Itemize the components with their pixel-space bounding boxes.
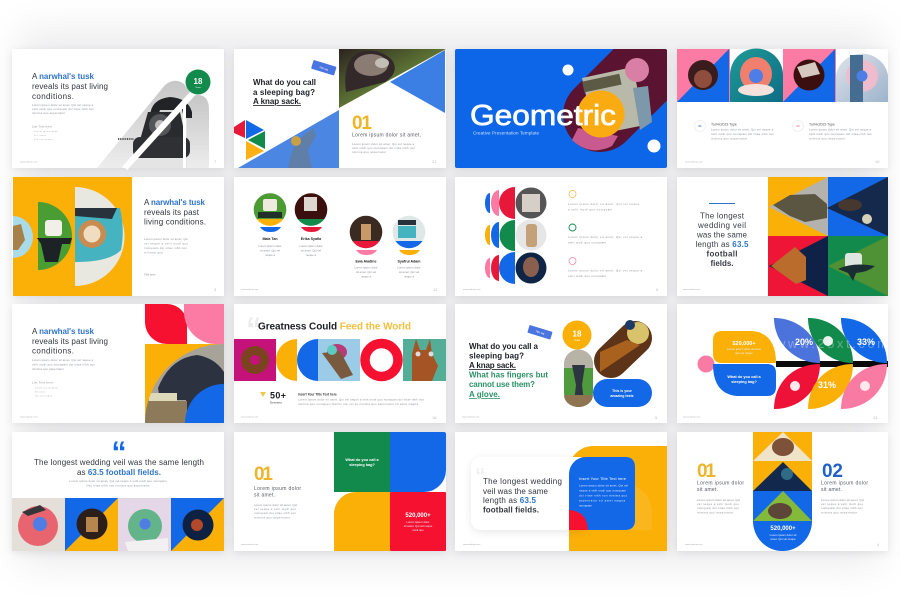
body text: vel neque a velit modi quo	[144, 242, 188, 246]
page footer: www.website.com	[462, 416, 480, 418]
item 2: velit modi quo numquam	[568, 240, 607, 244]
number 01: 01	[697, 461, 716, 482]
page footer: www.website.com	[463, 288, 481, 291]
tile: muffin arch	[730, 48, 783, 102]
row 3 shapes	[485, 252, 546, 284]
item 1: Lorem ipsum dolor sit amet. Qui vel neque	[568, 202, 639, 206]
text block: Lorem ipsum dolor sit amet. Qui	[254, 503, 297, 507]
panel: fingers glove slide	[455, 304, 667, 423]
panel: narwhal yellow slide	[12, 177, 224, 296]
quote text: The longest	[700, 212, 745, 220]
blue card: Lorem ipsum dolor sit amet. Qui vel	[579, 484, 628, 488]
page number: 3	[214, 287, 217, 292]
leaf: 20%	[774, 318, 820, 363]
body text	[32, 103, 94, 141]
block: red: sit amet. Qui vel neque	[404, 524, 433, 528]
stat: 50+ desserts	[260, 390, 286, 404]
member: Ewa Aladine: neque a	[361, 274, 371, 278]
blue card: numquam	[579, 504, 593, 508]
member: Erika Syafia: Lorem ipsum dolor	[299, 244, 323, 248]
page footer: 18	[432, 415, 437, 420]
heading: A knap sack.	[469, 361, 516, 370]
text block: sit amet.	[254, 492, 275, 498]
white quote card	[471, 457, 589, 530]
page footer: 12	[433, 287, 438, 292]
column tile: top	[753, 432, 812, 461]
panel: narwhal yellow slide: reveals its past	[144, 208, 200, 217]
panel: narwhal elephant slide: reveals its past living	[32, 337, 108, 346]
text block left	[697, 480, 744, 514]
quote text: football fields.	[483, 506, 539, 514]
stat: 50+ desserts: 50+	[270, 390, 286, 400]
text block right	[821, 480, 868, 514]
item: type 2: Tu04x2023 Type	[809, 122, 835, 126]
quote text: football	[706, 250, 738, 258]
member: Erika Syafia: Erika Syafia	[301, 237, 322, 241]
photo: radio in diagonal stadium	[563, 49, 667, 152]
tile: dark cake	[783, 49, 836, 102]
watermark: www.25xt.com	[775, 336, 888, 351]
text block left: Lorem ipsum dolor	[697, 480, 744, 486]
heading: cannot use them?	[469, 380, 535, 389]
panel: leaves diagram slide	[677, 304, 888, 423]
column base: 520,000+	[753, 521, 812, 551]
text block: minima quo aspernatur	[352, 150, 386, 154]
callout: yellow: Lorem ipsum dolor sit amet	[727, 347, 761, 351]
block: red: 520,000+	[405, 513, 431, 519]
number 01: 01	[254, 464, 273, 485]
callout: yellow: 520,000+	[732, 341, 756, 347]
text block left: minima quo aspernatur	[697, 510, 733, 514]
text block: velit modi quo numquam dui vitae nibh non	[352, 146, 415, 150]
body text: List Title here	[32, 124, 52, 128]
member: Mala Tan: sit amet. Qui vel	[260, 248, 280, 252]
item 2	[568, 224, 642, 244]
member: Ewa Aladine: Lorem ipsum dolor	[354, 266, 378, 270]
quadrant: green	[828, 236, 888, 296]
column base: 520,000+: 520,000+	[770, 526, 796, 532]
blue card	[569, 457, 635, 530]
title: Geometric	[470, 100, 616, 132]
tile: blue yellow dark circle	[65, 498, 118, 551]
number 01: 01	[352, 113, 372, 134]
leaf: green icon	[808, 318, 853, 363]
page footer: www.website.com	[683, 416, 701, 418]
body text: minima quo aspernatur	[32, 111, 65, 115]
column tile: lower	[753, 491, 812, 521]
member: Syafrul Adam: neque a	[404, 274, 414, 278]
panel: wedding veil grid slide	[677, 177, 888, 296]
item: type 2: velit modi quo numquam dui vitae nibh non	[809, 132, 872, 136]
leaf: 31%: 31%	[818, 380, 836, 390]
quote text: The longest wedding	[483, 477, 562, 486]
item 3	[568, 258, 642, 278]
text block: Lorem ipsum dolor	[254, 486, 301, 492]
quote text: The longest wedding veil was the same length	[34, 458, 204, 467]
column base: 520,000+: amet. Qui vel neque	[770, 537, 796, 541]
tag: Title tag	[535, 329, 545, 336]
quote text: as 63.5 football fields.	[77, 468, 161, 477]
body text: Lorem ipsum dolor sit amet. Qui vel neque a	[32, 358, 93, 362]
page footer	[20, 159, 217, 164]
body text: Lorem ipsum dolor sit amet. Qui	[144, 237, 188, 241]
shape: red	[145, 304, 187, 344]
body text: velit modi quo numquam dui vitae nibh non	[32, 362, 95, 366]
blue card: dui vitae nibh non minima quo	[579, 494, 627, 498]
column tile: middle	[753, 461, 812, 491]
item 1	[568, 190, 639, 212]
body text: velit modi quo numquam dui vitae nibh non	[32, 107, 94, 111]
block: green: sleeping bag?	[349, 463, 375, 467]
text block left: Lorem ipsum dolor sit amet. Qui	[697, 498, 740, 502]
blue card: aspernatur sit amet magna	[579, 498, 625, 502]
panel: narwhal phone slide: conditions.	[32, 92, 74, 101]
member: Ewa Aladine	[350, 216, 382, 278]
leaf: red icon	[774, 364, 820, 409]
text block left: sit amet.	[697, 487, 718, 493]
member: Syafrul Adam	[392, 216, 426, 278]
text block right: Lorem ipsum dolor	[821, 480, 868, 486]
photo: diagonal stadium	[600, 320, 649, 372]
tile: green toy	[118, 498, 171, 551]
page footer: www.website.com	[241, 543, 259, 546]
page footer: www.website.com	[683, 288, 701, 291]
item: type 1: minima quo aspernatur	[711, 136, 747, 140]
page footer: www.website.com	[20, 416, 38, 418]
page footer: www.website.com	[241, 416, 259, 418]
page footer: www.website.com	[241, 288, 259, 291]
block: green	[334, 432, 390, 492]
quote text	[483, 477, 562, 514]
stat: 50+ desserts: Desserts	[270, 400, 282, 404]
item 1: a velit modi quo numquam	[568, 208, 613, 212]
accent line	[709, 203, 735, 204]
leaf: 33%: 33%	[857, 337, 875, 347]
photo: jockey stadium	[564, 350, 593, 407]
page footer: 4	[877, 542, 880, 547]
subtitle: Creative Presentation Template	[473, 130, 539, 136]
panel: narwhal elephant slide	[12, 304, 224, 423]
badge: 18 years: 18	[194, 77, 203, 86]
member: Ewa Aladine: sit amet. Qui vel	[356, 270, 376, 274]
callout: yellow: Qui vel neque	[735, 351, 753, 355]
item 2: Lorem ipsum dolor sit amet. Qui vel neque a	[568, 235, 642, 239]
panel: narwhal phone slide: reveals its past living	[32, 82, 108, 91]
page footer	[685, 159, 880, 164]
text block right: sit amet.	[821, 487, 842, 493]
block: red	[390, 492, 446, 551]
body text: Lorem ipsum dolor sit amet. Qui vel neque a	[32, 103, 93, 107]
shape: pink	[184, 304, 224, 344]
item: type 1: 01	[698, 124, 702, 128]
callout: blue: sleeping bag?	[731, 380, 757, 384]
member: Mala Tan: Mala Tan	[262, 237, 278, 241]
item: type 2: minima quo aspernatur	[809, 136, 845, 140]
shape: elephant photo on yellow	[145, 344, 224, 423]
tile: pink arch	[836, 54, 888, 102]
body text: minima quo aspernatur	[32, 367, 64, 371]
heading: What has fingers but	[469, 370, 548, 380]
page footer: www.website.com	[463, 543, 481, 546]
arrow: black spine	[776, 361, 888, 367]
heading: sleeping bag?	[469, 352, 524, 360]
tag: Title tag	[319, 65, 329, 72]
photo triangle: bottom	[238, 110, 339, 168]
item: type 1: Tu04x2023 Type	[711, 122, 737, 126]
callout: blue	[713, 364, 776, 396]
tile: pink toy	[12, 498, 65, 551]
badge: 18 years: 18	[573, 330, 582, 338]
panel: sleeping bag slide	[234, 49, 446, 168]
block: red: Lorem ipsum dolor	[406, 520, 430, 524]
panel: narwhal elephant slide: conditions.	[32, 346, 74, 356]
text block left: vel neque a velit modi quo	[697, 502, 739, 506]
blue card: neque a velit modi quo numquam	[579, 488, 627, 492]
leaf: 31%	[808, 364, 853, 409]
body text: Qui vel neque	[34, 139, 53, 141]
yellow block with half-circle photos	[13, 177, 132, 296]
heading	[469, 342, 548, 399]
circle: yellow	[578, 90, 624, 138]
row 1 shapes	[485, 187, 546, 219]
text block	[298, 392, 424, 406]
member: Erika Syafia	[294, 193, 328, 256]
panel: greatness slide	[234, 304, 446, 423]
member: Syafrul Adam: Syafrul Adam	[397, 260, 421, 264]
item: type 2: Lorem ipsum dolor sit amet. Qui vel neque a	[809, 128, 871, 132]
item: type 1	[694, 120, 774, 140]
heading: What do you call	[253, 78, 316, 87]
text block: Lorem ipsum dolor sit amet. Qui vel neque a	[352, 142, 414, 146]
member: Mala Tan: Lorem ipsum dolor	[258, 244, 282, 248]
panel: colour blocks slide	[234, 432, 446, 551]
page footer: www.website.com	[685, 160, 703, 164]
page footer: 10	[875, 159, 880, 164]
leaf: 20%: 20%	[795, 337, 813, 347]
member: Mala Tan	[254, 193, 286, 256]
member: Syafrul Adam: Lorem ipsum dolor	[397, 266, 421, 270]
panel: narwhal phone slide	[12, 49, 224, 168]
page footer	[462, 415, 658, 420]
text block: Lorem ipsum dolor sit amet.	[352, 132, 421, 138]
badge: 18 years: Years	[574, 339, 581, 342]
text block right: numquam dui vitae nibh non	[821, 506, 863, 510]
triangle: blue top right	[390, 50, 445, 113]
pink dot	[698, 356, 714, 372]
quote text: length as 63.5	[483, 496, 537, 505]
member: Ewa Aladine: Ewa Aladine	[355, 260, 377, 264]
body text: Title here	[144, 272, 156, 276]
tile: toy rocket	[318, 339, 360, 381]
panel: triangles 01 02 slide	[677, 432, 888, 551]
heading: What do you call a	[469, 342, 539, 351]
body text	[32, 358, 95, 398]
page footer: 7	[214, 159, 217, 164]
body text: List Title here	[32, 380, 53, 384]
white quote card: “	[476, 462, 485, 492]
page footer	[685, 542, 880, 547]
quadrant: navy blue	[827, 177, 888, 236]
photo triangle: top	[339, 49, 446, 108]
body text: Qui vel neque	[35, 396, 53, 398]
page footer	[683, 415, 878, 420]
text block: minima quo numquam facilisi nisi vel sit minima quo aspernatur sit amet magna	[298, 402, 418, 406]
item: type 1: velit modi quo numquam dui vitae nibh non	[711, 132, 774, 136]
page footer	[463, 287, 659, 292]
body text: Lorem ipsum dolor	[35, 386, 58, 390]
panel: narwhal yellow slide: living conditions.	[144, 218, 206, 226]
badge: 18 years: Years	[195, 86, 202, 89]
panel: 2023 type slide	[677, 48, 888, 168]
member: Syafrul Adam: sit amet. Qui vel	[399, 270, 419, 274]
text block left: numquam dui vitae nibh non	[697, 506, 739, 510]
logo: hexagon triangles	[234, 120, 265, 160]
block: blue	[390, 432, 446, 492]
body text: Lorem ipsum dolor sit amet. Qui vel neque a velit modi quo numquam	[70, 479, 167, 483]
leaf: pink icon	[841, 364, 887, 409]
photo: telephone in grey shapes	[97, 81, 209, 168]
quadrant: car	[768, 177, 828, 236]
member: Erika Syafia: neque a	[306, 253, 316, 257]
item: type 1: Lorem ipsum dolor sit amet. Qui vel neque a	[711, 128, 773, 132]
heading: A narwhal's tusk	[32, 327, 95, 336]
quote text: wedding veil	[697, 221, 746, 230]
text block right: vel neque a velit modi quo	[821, 502, 863, 506]
row 2 shapes	[485, 220, 546, 251]
text block: vel neque a velit modi quo	[254, 507, 296, 511]
page footer	[241, 415, 437, 420]
badge: 18 years	[186, 70, 210, 94]
shape: red ring	[365, 344, 398, 376]
panel: team slide	[234, 177, 446, 296]
quote text: was the same	[696, 230, 748, 240]
item 3: Lorem ipsum dolor sit amet. Qui vel neque a	[568, 268, 642, 272]
body text: Sit amet	[34, 134, 46, 137]
callout: yellow	[713, 331, 776, 363]
page footer: www.website.com	[20, 160, 38, 164]
text block	[254, 486, 301, 520]
text block: Insert Your Title Text here	[298, 392, 337, 396]
page footer: 13	[873, 415, 878, 420]
blue card: Insert Your Title Text here	[579, 477, 626, 481]
block: yellow	[334, 492, 390, 551]
heading: Greatness Could Feed the World	[258, 322, 411, 332]
item: type 2	[792, 120, 872, 140]
callout: amazing texts: amazing texts	[610, 394, 634, 398]
quote mark: “	[112, 436, 126, 469]
quote text: fields.	[710, 259, 734, 268]
text block: Lorem ipsum dolor sit amet. Qui vel neque a velit modi quo numquam dui vitae nibh non	[298, 398, 424, 402]
shape: yellow half circle	[276, 339, 297, 381]
tag	[527, 325, 553, 340]
tile: donut	[234, 339, 276, 381]
text block right: minima quo aspernatur	[821, 510, 857, 514]
body text	[70, 479, 167, 488]
tile: bunny	[403, 339, 446, 381]
callout: amazing texts: This is your	[612, 389, 632, 393]
panel: quote four photos slide	[12, 432, 224, 551]
tile: chocolate	[677, 49, 730, 102]
column base: 520,000+: Lorem ipsum dolor sit	[770, 533, 797, 537]
page footer: 5	[656, 287, 659, 292]
panel: blue card quote slide	[455, 432, 667, 551]
item 3: velit modi quo numquam	[568, 274, 607, 278]
quote text	[696, 212, 749, 268]
heading: A narwhal's tusk	[32, 72, 95, 81]
decorative white circles	[562, 64, 660, 152]
quadrant: red	[768, 236, 828, 296]
text block right: Lorem ipsum dolor sit amet. Qui	[821, 498, 864, 502]
tag	[311, 60, 337, 76]
body text: numquam dui vitae nibh non	[144, 246, 187, 250]
quote mark: “	[246, 311, 262, 347]
body text: Nec vitae nibh non minima quo aspernatur	[86, 484, 150, 488]
yellow block	[569, 446, 667, 551]
item: type 2: 02	[796, 124, 800, 128]
badge: 18 years	[562, 320, 592, 350]
quote text	[34, 458, 204, 477]
quote text: veil was the same	[483, 487, 549, 496]
text block	[352, 132, 421, 154]
member: Mala Tan: neque a	[265, 253, 275, 257]
number 02: 02	[822, 461, 843, 482]
page footer: 5	[655, 415, 658, 420]
block: green: What do you call a	[345, 458, 380, 462]
heading: A narwhal's tusk	[144, 198, 206, 207]
body text: Sit amet	[35, 390, 45, 394]
heading	[253, 78, 316, 106]
tile: blue yellow navy circle	[171, 498, 224, 551]
shape: blue half circle	[297, 339, 318, 381]
heading: A glove.	[469, 390, 500, 399]
page footer	[241, 287, 438, 292]
text block: numquam dui vitae nibh non	[254, 511, 296, 515]
page footer: www.website.com	[685, 543, 703, 546]
text block: minima quo aspernatur	[254, 516, 290, 520]
callout: blue: What do you call a	[727, 375, 762, 379]
body text: Lorem ipsum dolor	[34, 130, 58, 133]
panel: Geometric cover slide	[454, 49, 668, 171]
callout: amazing texts	[593, 379, 652, 407]
member: Erika Syafia: sit amet. Qui vel	[301, 248, 321, 252]
body text	[144, 237, 188, 276]
block: red: modi quo	[412, 528, 424, 532]
leaf: 33%	[841, 318, 887, 363]
quote text: length as 63.5	[696, 240, 749, 249]
heading: a sleeping bag?	[253, 88, 315, 97]
page number: 21	[432, 159, 437, 164]
panel: three circles slide	[455, 177, 667, 296]
body text: minima quo	[144, 250, 163, 254]
heading: A knap sack.	[253, 97, 301, 106]
